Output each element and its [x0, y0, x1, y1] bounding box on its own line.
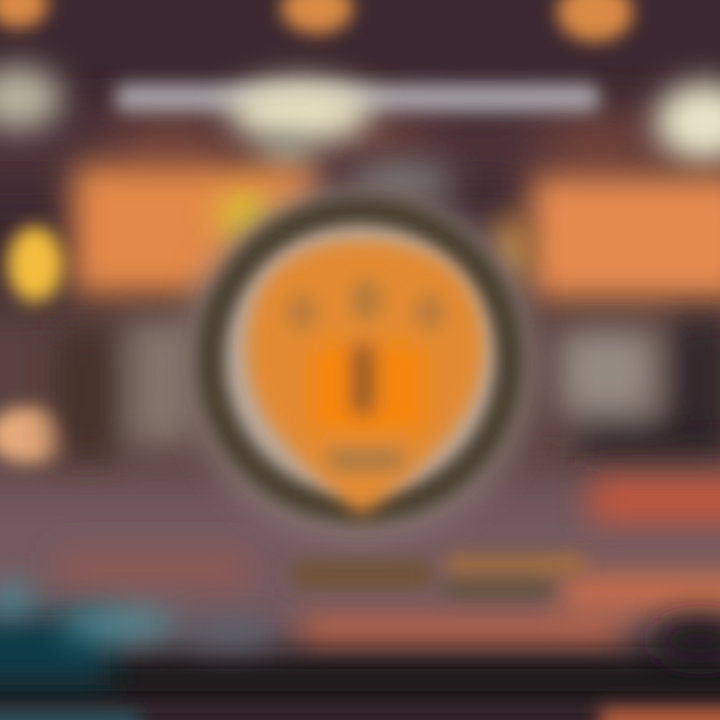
side panels — [55, 320, 720, 460]
emblem ring — [210, 210, 510, 510]
top lights — [0, 0, 633, 42]
right orange panel — [492, 175, 720, 300]
caption — [292, 556, 585, 596]
shield — [246, 240, 484, 515]
circular emblem — [185, 187, 535, 537]
heading band — [0, 66, 720, 196]
left orange panel — [0, 165, 317, 463]
shield figures — [288, 280, 444, 470]
lower platform — [60, 478, 720, 646]
bottom dark band — [0, 586, 720, 720]
